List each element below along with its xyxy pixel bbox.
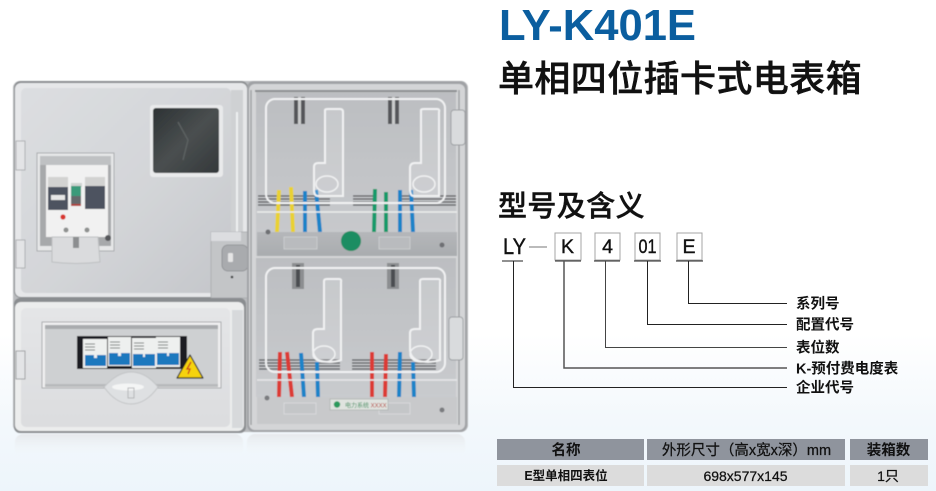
clear finger grip	[104, 372, 158, 404]
label: configuration code: 配置代号	[796, 316, 854, 334]
upper meter section	[257, 97, 457, 256]
row cell: quantity: 1只	[877, 468, 899, 484]
specification table	[497, 439, 928, 486]
bar screws	[266, 230, 444, 248]
row of four miniature breakers	[77, 336, 187, 369]
row cell: type: E型单相四表位	[524, 468, 608, 483]
bar screws	[264, 396, 444, 412]
header cell: dimensions: 外形尺寸（高x宽x深）mm	[662, 442, 831, 459]
code LY	[502, 234, 547, 261]
right inner compartment frame	[247, 81, 467, 432]
breaker cover tab	[52, 237, 100, 264]
leader line: series number	[688, 261, 787, 304]
label: meter positions: 表位数	[796, 338, 840, 356]
row cell: type	[497, 465, 644, 486]
code box 01: 01	[638, 236, 656, 258]
row cell: size: 698x577x145	[703, 468, 788, 484]
left lower door	[14, 298, 246, 433]
code box 4: 4	[602, 236, 613, 258]
mounting clips	[292, 263, 399, 289]
lower hinge	[16, 351, 25, 379]
green seal button	[341, 231, 361, 251]
subtitle: product name: 单相四位插卡式电表箱	[498, 58, 862, 99]
left upper door	[14, 81, 250, 298]
reflection under the box	[15, 434, 465, 458]
model code diagram	[502, 233, 899, 396]
code box 4	[594, 233, 620, 261]
label: company code: 企业代号	[796, 378, 854, 396]
hinges	[16, 141, 25, 268]
header cell: name	[497, 439, 644, 460]
leader line: prepaid meter	[564, 261, 787, 368]
breaker window	[42, 322, 221, 388]
circuit breaker recess	[37, 153, 114, 251]
right hinges	[449, 110, 465, 360]
terminal screws	[64, 228, 111, 241]
label: series number: 系列号	[796, 294, 840, 312]
breaker 4	[156, 337, 180, 367]
red indicator	[60, 214, 66, 220]
code box 01	[634, 233, 661, 261]
box outer casing	[13, 81, 468, 432]
warning triangle	[177, 355, 203, 378]
bar label slots	[284, 237, 410, 249]
breaker 1	[83, 339, 107, 368]
header cell: quantity per case: 装箱数	[867, 441, 911, 459]
terminal rails	[258, 196, 456, 205]
leader line: configuration code	[648, 261, 787, 324]
bar label slots	[284, 403, 410, 414]
breaker switch	[71, 183, 82, 206]
code box E	[676, 233, 703, 261]
heading: model meaning: 型号及含义	[498, 190, 645, 223]
coloured wires	[279, 352, 414, 397]
code box K: K	[561, 236, 574, 258]
breaker 2	[108, 337, 131, 366]
title: model number: LY-K401E	[499, 1, 696, 50]
meter viewing window	[150, 105, 223, 177]
header cell: name: 名称	[552, 441, 581, 459]
lower cover bar	[257, 397, 457, 424]
breaker 3	[132, 338, 156, 368]
header cell: dimensions	[647, 439, 845, 460]
row cell: size	[647, 465, 845, 486]
label: prepaid meter: K-预付费电度表	[796, 360, 899, 378]
code LY: LY	[503, 234, 526, 259]
door latch	[211, 232, 250, 298]
transparent meter cover	[266, 268, 445, 372]
lower meter section	[257, 263, 457, 424]
brand sticker	[330, 399, 388, 410]
breaker label left	[48, 177, 68, 210]
code box E: E	[682, 236, 696, 258]
product photo: meter box	[13, 81, 468, 458]
breaker label right	[85, 177, 105, 209]
brand sticker: 电力系统 XXXX	[345, 402, 387, 410]
transparent meter cover	[266, 99, 445, 203]
header cell: quantity per case	[850, 439, 928, 460]
mounting clips	[294, 97, 399, 124]
coloured wires	[277, 187, 413, 232]
row cell: quantity	[850, 465, 928, 486]
leader line: company code	[514, 261, 787, 388]
leader line: meter positions	[606, 261, 787, 348]
upper cover bar	[257, 232, 457, 256]
terminal rails	[259, 360, 436, 369]
code box K	[555, 233, 581, 261]
